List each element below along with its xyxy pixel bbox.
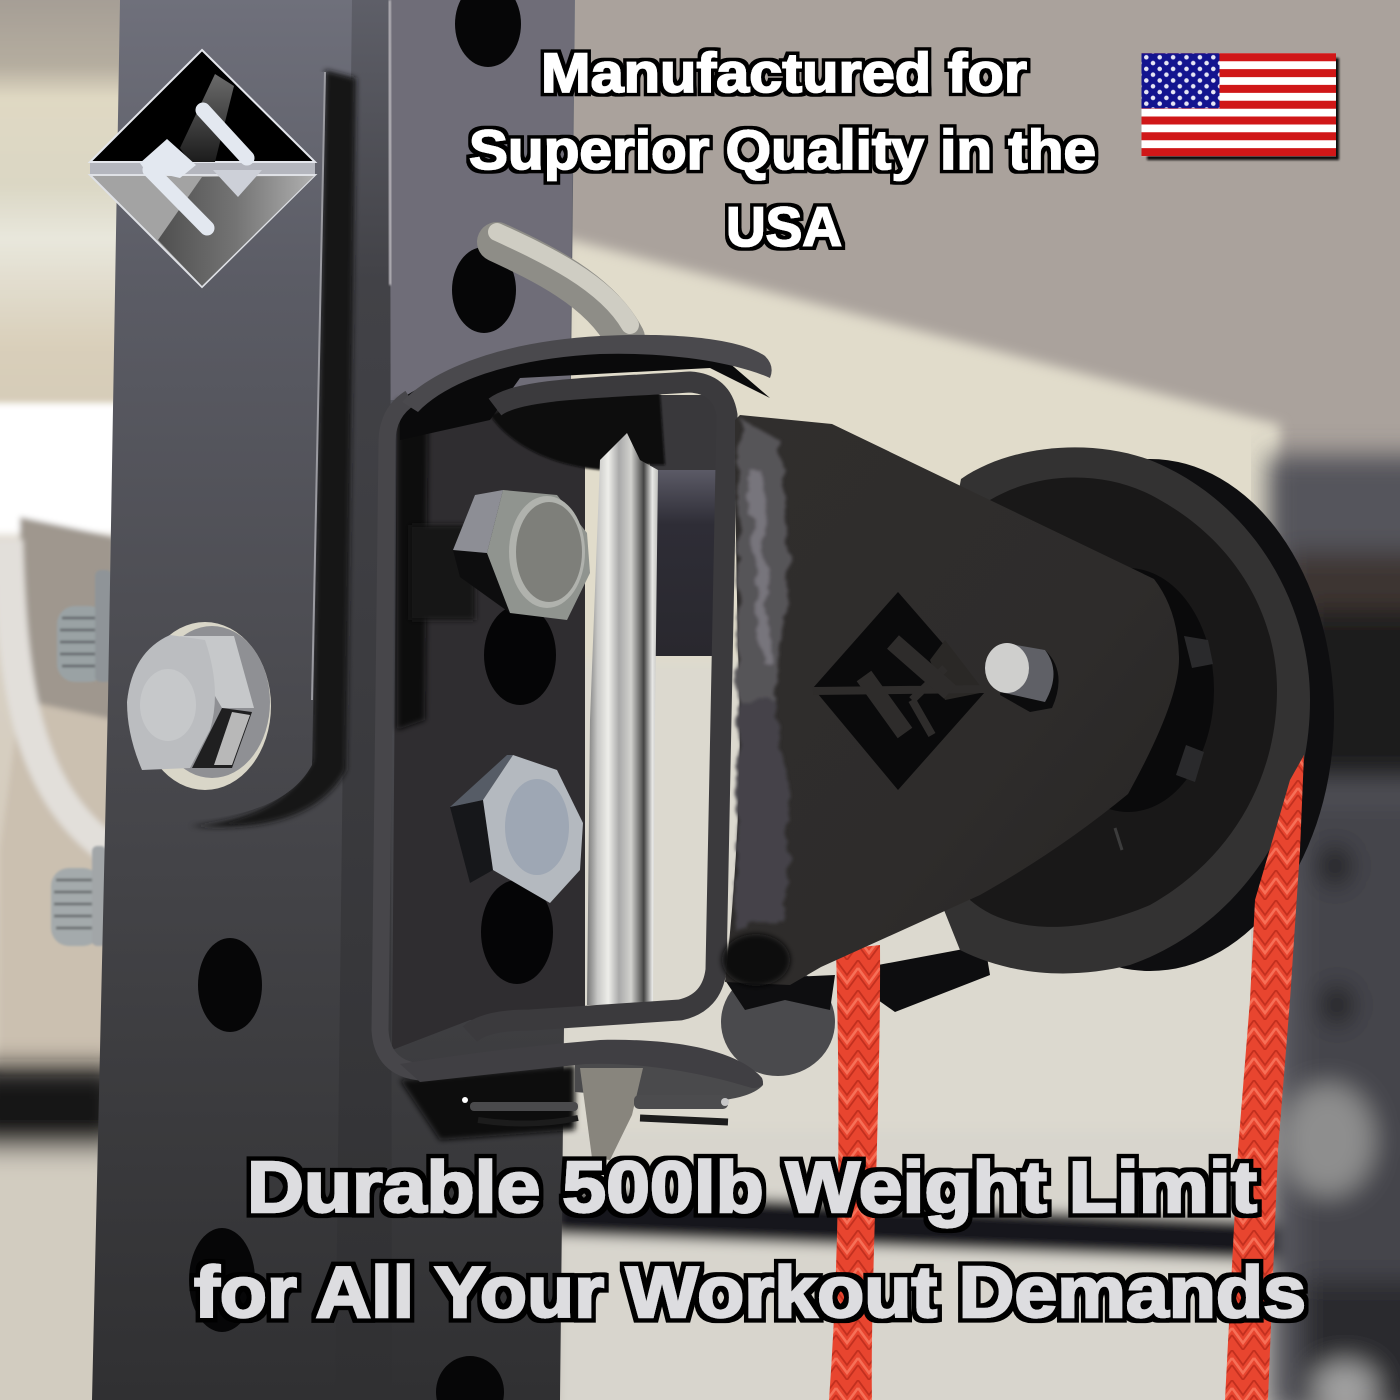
flag shadow [1147, 58, 1339, 160]
bolt side facets [180, 636, 254, 708]
window post shade [392, 395, 585, 1050]
bottom headline: for All Your Workout Demands [194, 1253, 1306, 1333]
top headline: USA [726, 195, 842, 258]
inner U strap [470, 382, 727, 1034]
pulley wheel [878, 447, 1334, 1012]
bracket arm under plate [878, 945, 990, 1012]
plate shadow [190, 70, 356, 827]
recess [970, 478, 1277, 927]
dark channel beside plate [335, 0, 392, 1400]
front flange [900, 447, 1310, 973]
post shadow below bracket [400, 1065, 575, 1140]
bottom headline [194, 1148, 1306, 1333]
rear flange [966, 459, 1334, 971]
top headline [469, 41, 1096, 258]
pivot bracket [380, 335, 835, 1160]
bolt face [127, 635, 215, 770]
cotter pin [462, 1068, 729, 1160]
logo mark [90, 50, 315, 287]
bottom tab underside [575, 1058, 763, 1102]
American flag [1142, 53, 1339, 160]
hub [1042, 568, 1214, 812]
red rope left [829, 945, 880, 1400]
logo letter bars [150, 110, 247, 228]
bottom headline: Durable 500lb Weight Limit [247, 1148, 1257, 1228]
post holes [189, 0, 521, 1400]
spring pin handle [497, 232, 630, 338]
top headline: Manufactured for [541, 41, 1027, 104]
underside shadow of inner tab [490, 392, 665, 470]
steel pin [587, 433, 658, 1005]
lower hex bolt [450, 755, 583, 903]
cut-out logo [813, 592, 985, 790]
rear threaded bolts [51, 570, 112, 946]
logo middle band [90, 163, 315, 175]
top headline: Superior Quality in the [469, 118, 1096, 181]
weld dark blotch [722, 934, 790, 986]
top interior [650, 395, 718, 470]
large hex bolt and washer [127, 622, 271, 790]
weld seam [735, 418, 790, 930]
outer bottom tab [400, 1040, 763, 1088]
post side face [390, 0, 574, 400]
axle stud [985, 643, 1059, 712]
logo top half [90, 50, 315, 162]
logo bottom half [90, 175, 315, 287]
logo notch [213, 170, 262, 197]
upper hex bolt [453, 490, 590, 620]
rear knuckle [721, 968, 835, 1076]
outer top tab [402, 335, 772, 412]
rack upright post [92, 0, 575, 1400]
outer U strap side [380, 398, 420, 1072]
red rope right [1225, 755, 1304, 1400]
triangular pulley side plate [722, 415, 1179, 986]
logo left blob [140, 139, 196, 178]
holes behind bolts [410, 525, 556, 984]
dark tube [650, 468, 718, 656]
mounting plate [112, 60, 356, 827]
